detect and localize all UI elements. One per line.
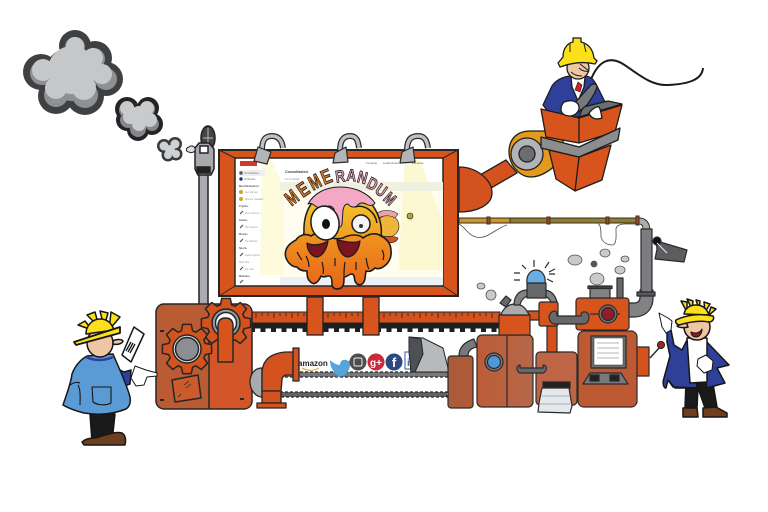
logos row: amazon: [298, 359, 328, 368]
logos row: g+: [370, 358, 382, 369]
ribbed hose left: [459, 339, 477, 356]
screen content: Trending: [366, 161, 377, 165]
screen content: [239, 160, 443, 285]
title: meme randum: D: [364, 174, 381, 195]
logos row: [298, 352, 416, 377]
screen content: Top Movies: [245, 240, 258, 243]
large smoke cloud: [23, 30, 123, 115]
small gear: [162, 324, 212, 374]
twitter bird: [330, 359, 352, 377]
left worker: [63, 311, 157, 445]
screen content: Start Site: [239, 261, 250, 264]
meme randum mascot: [285, 187, 413, 289]
logos row: in: [407, 358, 416, 369]
screen content: Get Memes: [245, 191, 259, 194]
blue coat: [663, 330, 729, 388]
screen content: Movies: [239, 233, 248, 236]
title: meme randum: N: [355, 168, 369, 189]
screen content: Games: [239, 219, 248, 222]
screen content: Top Games: [245, 226, 259, 229]
right worker: [659, 299, 729, 417]
billboard: [219, 150, 458, 335]
title: meme randum: [281, 164, 399, 210]
mascot icing: [308, 187, 375, 228]
title: meme randum: A: [346, 166, 357, 186]
head: [684, 314, 710, 340]
right machine group: [448, 229, 687, 413]
head: [87, 329, 113, 357]
legs and shoes: [82, 414, 126, 445]
screen content: Meet Moderators: [239, 185, 260, 188]
billboard legs: [307, 297, 379, 335]
billboard lamps: [254, 136, 428, 164]
screen content: Leaderboard: [383, 161, 399, 165]
billboard frame: [219, 150, 458, 296]
cabinet three with printer: [517, 352, 577, 413]
title: meme randum: E: [318, 164, 336, 189]
upper block three: [576, 298, 629, 330]
conveyor rail with ruler: [250, 312, 500, 330]
cabinet four with computer: [578, 331, 637, 407]
bucket: [541, 101, 622, 191]
upper block one: [499, 315, 530, 335]
screen content: Sports: [239, 247, 248, 250]
top pipe: [459, 216, 650, 229]
mascot mouths: [307, 241, 328, 257]
hanging wires: [459, 224, 640, 245]
coat: [63, 354, 130, 414]
title: meme randum: M: [305, 170, 325, 195]
mascot eyes: [308, 204, 342, 242]
gear box: [156, 298, 252, 409]
large gear: [201, 298, 251, 348]
title: meme randum: R: [334, 167, 346, 187]
pointing hand: [659, 313, 672, 333]
screen content: Price Memes: [245, 212, 260, 215]
ribbed hose between blocks: [549, 311, 589, 324]
cutting machine funnel: [409, 337, 449, 372]
cabinet one: [448, 356, 473, 408]
legs and shoes: [683, 378, 727, 417]
mascot melting body: [285, 233, 391, 289]
speaker: [653, 237, 687, 262]
glove holding notes: [697, 355, 713, 373]
beacon and pipe: [514, 260, 557, 305]
elbow pipe: [250, 348, 449, 408]
screen content: Cryptos: [239, 205, 249, 208]
screen content: Latest Sports: [245, 254, 260, 257]
mascot head: [303, 188, 381, 246]
chimney with valve wheel: [186, 126, 215, 305]
dome: [501, 304, 529, 315]
top worker with cable: [543, 38, 703, 118]
title: meme randum: M: [379, 189, 399, 210]
screen content: All Boards: [244, 178, 256, 181]
lever box: [637, 342, 664, 376]
connector column: [547, 326, 557, 352]
screen content: Websites: [239, 275, 251, 278]
boom arm with joint: [459, 131, 563, 212]
shirt: [687, 338, 707, 383]
screen content: Consolidated: [285, 170, 308, 174]
hat: [74, 311, 120, 345]
hat: [676, 299, 716, 325]
blue arm and glove: [105, 364, 157, 387]
logos row: f: [392, 355, 397, 370]
window plate: [172, 375, 201, 402]
small background mascot: [376, 210, 413, 243]
cabinet two: [477, 335, 533, 407]
machine smoke puffs: [477, 249, 629, 300]
screen content: Consolidated: [244, 172, 259, 175]
worker hands and tablet: [561, 84, 602, 119]
card: [122, 327, 144, 362]
screen content: Memes Updates: [245, 198, 264, 201]
vertical hose and pipe: [629, 229, 655, 317]
title: meme randum: M: [281, 186, 303, 210]
medium smoke cloud: [115, 97, 163, 141]
small smoke cloud: [157, 137, 182, 162]
upper block two: [539, 302, 558, 326]
title: meme randum: U: [372, 180, 390, 201]
screen content: Advertise: [412, 161, 424, 165]
title: meme randum: E: [293, 177, 314, 202]
valve: [500, 296, 511, 307]
screen content: Go to Global: [285, 178, 299, 181]
screen content: Top Site: [245, 268, 255, 271]
exhaust stacks: [588, 278, 623, 298]
